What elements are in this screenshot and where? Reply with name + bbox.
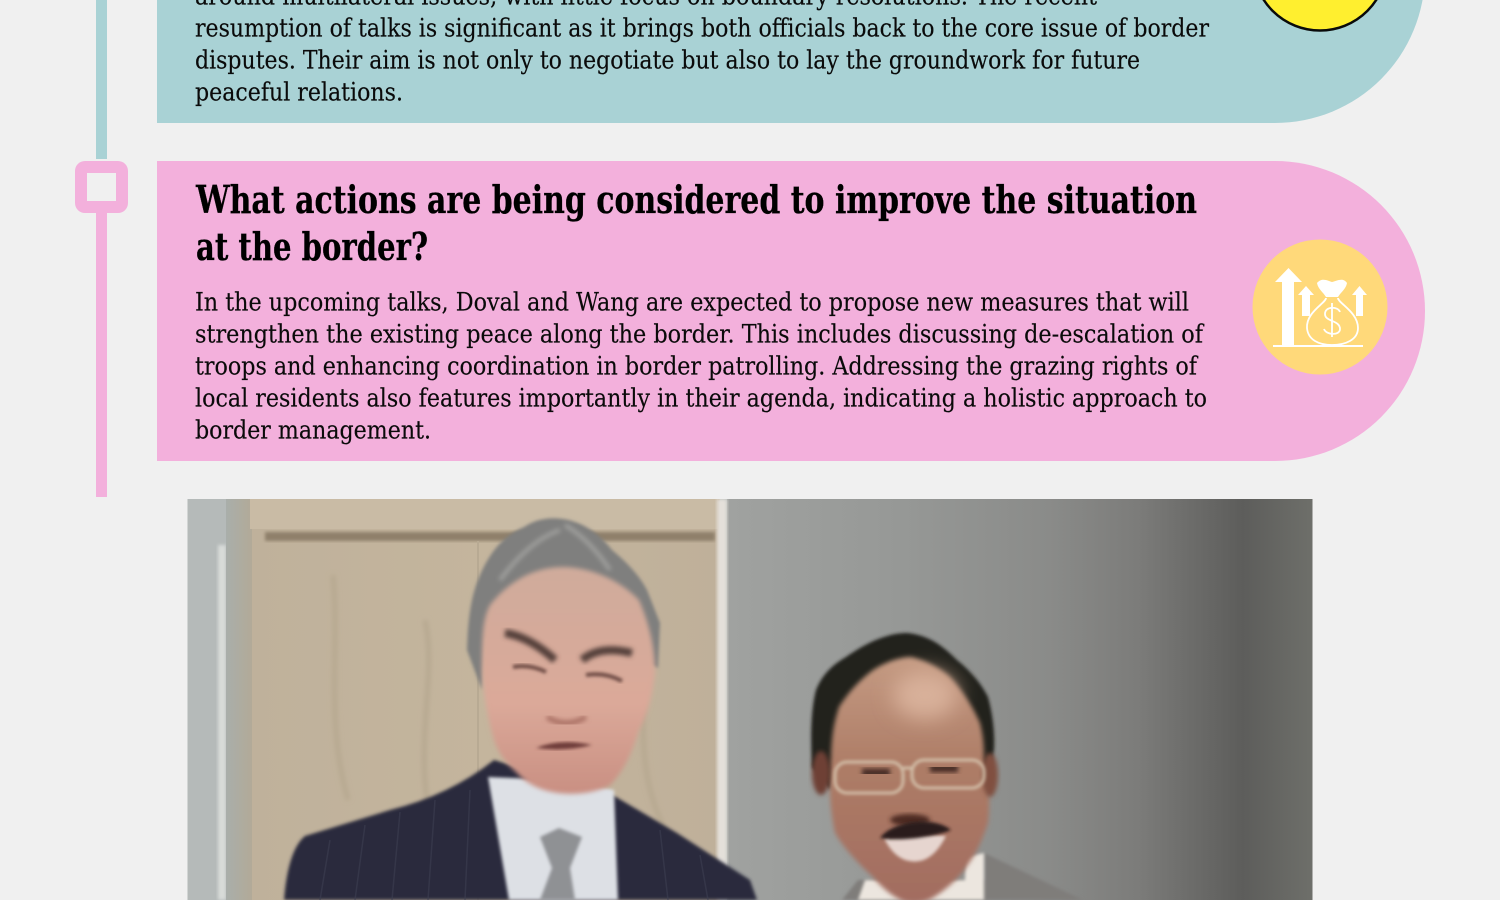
- shirt: [858, 853, 984, 900]
- body text: talks resumption: resumption of talks is significant as it brings both officials back to the core issue of border: [195, 14, 1209, 42]
- timeline segment: pink: [96, 211, 107, 497]
- jacket: [284, 760, 757, 900]
- body text: talks resumption: peaceful relations.: [195, 78, 403, 106]
- eyebrows: [505, 633, 632, 660]
- photo: Wang Yi and Ajit Doval: [188, 499, 1313, 900]
- panel: actions under consideration: [157, 161, 1425, 461]
- heading: actions under consideration: at the border?: [196, 224, 428, 269]
- icon: yellow circle: [1253, 0, 1387, 30]
- body text: proposed measures: border management.: [195, 416, 431, 444]
- eyes: [862, 768, 958, 773]
- mouth: [536, 742, 592, 749]
- panel: talks resumption: [157, 0, 1425, 123]
- heading: actions under consideration: [195, 177, 1197, 269]
- timeline segment: teal: [96, 0, 107, 159]
- moustache: [880, 822, 951, 839]
- body text: talks resumption: [195, 0, 1209, 106]
- hair highlights: [500, 525, 610, 580]
- heading: actions under consideration: What actions are being considered to improve the situation: [195, 177, 1197, 222]
- body text: proposed measures: local residents also features importantly in their agenda, indicating a holistic approach to: [195, 384, 1207, 412]
- ears: [812, 751, 830, 795]
- body text: talks resumption: disputes. Their aim is not only to negotiate but also to lay the groundwork for future: [195, 46, 1140, 74]
- body text: proposed measures: troops and enhancing coordination in border patrolling. Addressing the grazing rights of: [195, 352, 1199, 380]
- icon: money bag with rising arrows: [1252, 240, 1388, 374]
- person: Ajit Doval: [811, 633, 1083, 900]
- eyes: [513, 666, 622, 681]
- nose: [547, 717, 586, 723]
- face: [482, 567, 655, 794]
- person: Wang Yi: [284, 518, 757, 900]
- timeline marker: [75, 161, 128, 213]
- nose shadow: [890, 814, 930, 826]
- body text: proposed measures: In the upcoming talks, Doval and Wang are expected to propose new measures that will: [195, 288, 1189, 316]
- suit: [842, 853, 1083, 900]
- dark hair: [811, 633, 994, 790]
- photo background: [188, 499, 1313, 900]
- shirt collar: [488, 777, 618, 900]
- face: [830, 657, 989, 900]
- forehead highlight: [893, 671, 957, 719]
- body text: proposed measures: strengthen the existing peace along the border. This includes discussing de-escalation of: [195, 320, 1205, 348]
- body text: proposed measures: [195, 288, 1207, 444]
- glasses: [835, 760, 984, 793]
- tie: [540, 828, 582, 900]
- pinstripes: [320, 790, 708, 900]
- smile: [884, 834, 946, 862]
- hair: [467, 518, 660, 690]
